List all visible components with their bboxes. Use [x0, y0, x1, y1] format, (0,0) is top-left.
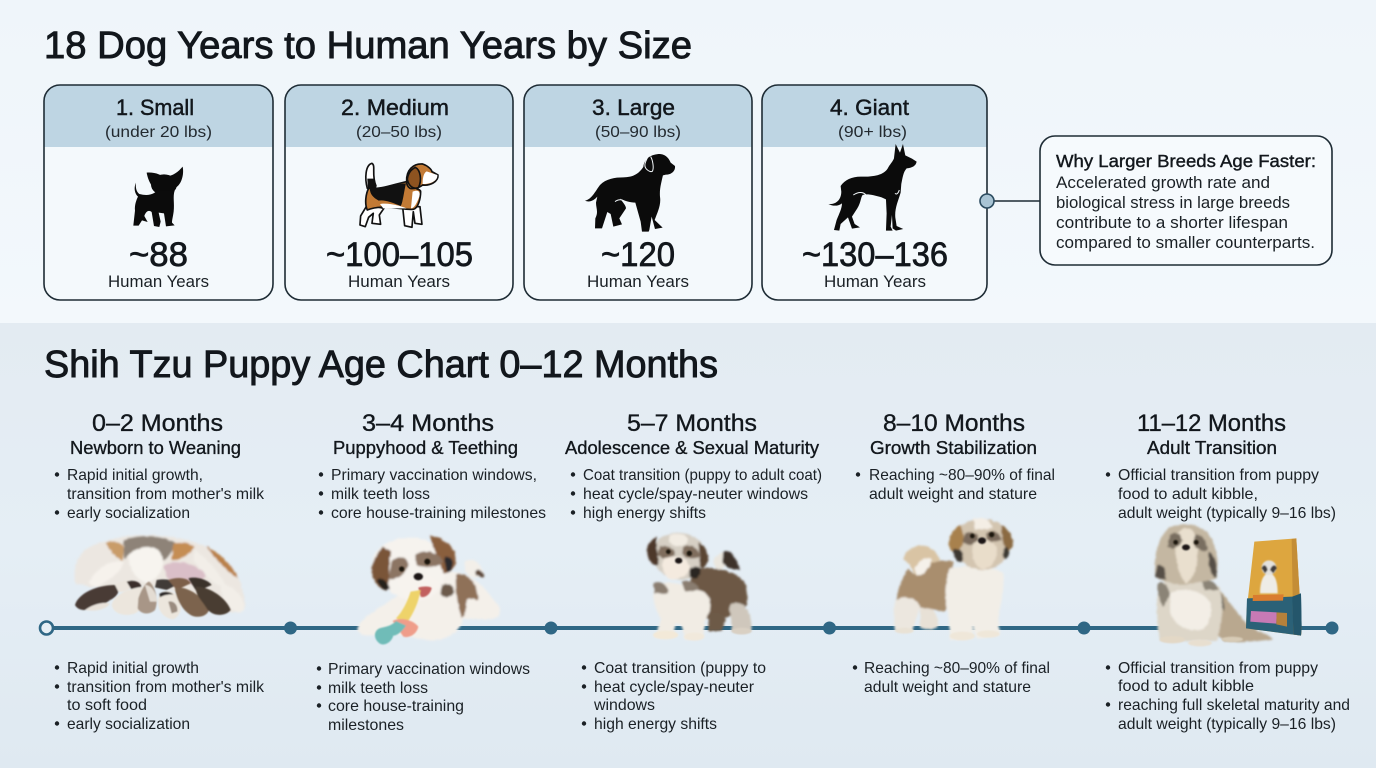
- stage 1 lower bullets: Rapid initial growth: [67, 660, 199, 677]
- callout body: contribute to a shorter lifespan: [1056, 213, 1288, 232]
- callout body: Accelerated growth rate and: [1056, 173, 1270, 192]
- stage 2 lower bullets: core house-training: [328, 698, 464, 715]
- stage 4 upper bullets: [856, 467, 1055, 503]
- stage 2 subtitle: Puppyhood & Teething: [333, 437, 518, 458]
- stage 2 upper bullets: Primary vaccination windows,: [331, 467, 537, 484]
- stage 1 lower bullets: transition from mother's milk: [67, 679, 265, 696]
- stage 4 header and notes: [856, 410, 1055, 503]
- stage 3 upper bullets: [571, 467, 822, 522]
- stage 2 lower bullets: Primary vaccination windows: [328, 661, 530, 678]
- weight range: large: (50–90 lbs): [595, 124, 681, 141]
- stage 5 upper bullets: food to adult kibble,: [1118, 486, 1258, 503]
- callout body: compared to smaller counterparts.: [1056, 233, 1315, 252]
- stage 5 lower bullets: reaching full skeletal maturity and: [1118, 697, 1350, 714]
- stage 3 lower bullets: high energy shifts: [594, 716, 717, 733]
- image: juvenile shih tzu: [894, 518, 1013, 640]
- stage 4 upper bullets: Reaching ~80–90% of final: [869, 467, 1055, 484]
- panel: medium dog card: [285, 85, 513, 300]
- stat: giant: ~130–136: [802, 236, 948, 274]
- timeline: [40, 622, 1338, 634]
- weight range: giant: (90+ lbs): [838, 124, 907, 141]
- stage 1 heading: 0–2 Months: [92, 410, 223, 437]
- stage 4 subtitle: Growth Stabilization: [870, 437, 1037, 458]
- stage 1 upper bullets: transition from mother's milk: [67, 486, 265, 503]
- stage 3 lower bullets: windows: [593, 697, 655, 714]
- stage 3 lower bullets: heat cycle/spay-neuter: [594, 679, 755, 696]
- unit: medium: Human Years: [348, 272, 450, 291]
- stage 1 upper bullets: [55, 467, 265, 522]
- stage 3 upper bullets: Coat transition (puppy to adult coat): [583, 467, 822, 484]
- image: adult shih tzu: [1155, 524, 1273, 646]
- stage 5 lower bullets: Official transition from puppy: [1118, 660, 1318, 677]
- stage 2 lower bullets: milestones: [328, 717, 404, 734]
- stage 1 lower bullets: early socialization: [67, 716, 190, 733]
- background: bottom section: [0, 323, 1376, 768]
- stage 3 lower bullets: Coat transition (puppy to: [594, 660, 766, 677]
- title: puppy age chart: Shih Tzu Puppy Age Chart 0–12 Months: [44, 344, 718, 386]
- icon: chihuahua silhouette: [133, 167, 183, 227]
- stage 4 upper bullets: adult weight and stature: [869, 486, 1037, 503]
- stat: small: ~88: [129, 236, 188, 274]
- stage 3 lower bullets: [582, 660, 766, 733]
- stage 1 upper bullets: Rapid initial growth,: [67, 467, 203, 484]
- image: mother dog nursing puppies: [75, 535, 245, 619]
- stage 3 upper bullets: heat cycle/spay-neuter windows: [583, 486, 808, 503]
- callout heading: Why Larger Breeds Age Faster:: [1056, 151, 1316, 171]
- stat: medium: ~100–105: [326, 236, 473, 274]
- icon: great dane silhouette: [828, 144, 917, 231]
- heading: large: 3. Large: [592, 95, 675, 120]
- unit: giant: Human Years: [824, 272, 926, 291]
- image: adolescent shih tzu: [647, 533, 752, 641]
- stage 2 lower bullets: [317, 661, 530, 734]
- stage 4 lower bullets: adult weight and stature: [864, 679, 1031, 696]
- image: dog food bag: [1246, 538, 1302, 636]
- stage 5 upper bullets: adult weight (typically 9–16 lbs): [1118, 505, 1336, 522]
- weight range: small: (under 20 lbs): [105, 124, 212, 141]
- stage 5 upper bullets: Official transition from puppy: [1118, 467, 1319, 484]
- connector: giant card to callout: [980, 194, 1040, 208]
- weight range: medium: (20–50 lbs): [356, 124, 442, 141]
- heading: small: 1. Small: [116, 95, 194, 120]
- stage 2 heading: 3–4 Months: [362, 410, 494, 437]
- stage 5 lower bullets: [1106, 660, 1350, 733]
- stage 4 lower bullets: [853, 660, 1050, 696]
- stage 3 header and notes: [565, 410, 822, 522]
- panel: small dog card: [44, 85, 273, 300]
- callout body: biological stress in large breeds: [1056, 193, 1290, 212]
- stage 5 upper bullets: [1106, 467, 1336, 522]
- stage 3 subtitle: Adolescence & Sexual Maturity: [565, 437, 820, 458]
- stage 4 lower bullets: Reaching ~80–90% of final: [864, 660, 1050, 677]
- icon: retriever silhouette: [585, 154, 675, 232]
- callout: why larger breeds age faster: [1040, 136, 1332, 265]
- panel: large dog card: [524, 85, 752, 300]
- heading: medium: 2. Medium: [341, 95, 449, 120]
- stage 1 upper bullets: early socialization: [67, 505, 190, 522]
- stage 3 upper bullets: high energy shifts: [583, 505, 706, 522]
- stage 1 lower bullets: to soft food: [67, 697, 147, 714]
- stage 5 heading: 11–12 Months: [1137, 410, 1286, 437]
- stage 2 header and notes: [319, 410, 546, 522]
- panel: giant dog card: [762, 85, 987, 300]
- stage 2 upper bullets: core house-training milestones: [331, 505, 546, 522]
- stage 2 upper bullets: milk teeth loss: [331, 486, 430, 503]
- stage 3 heading: 5–7 Months: [627, 410, 757, 437]
- heading: giant: 4. Giant: [830, 95, 909, 120]
- stage 2 lower bullets: milk teeth loss: [328, 680, 428, 697]
- background: top section: [0, 0, 1376, 323]
- stat: large: ~120: [601, 236, 675, 274]
- stage 1 lower bullets: [55, 660, 265, 733]
- stage 1 header and notes: [55, 410, 265, 522]
- stage 5 subtitle: Adult Transition: [1147, 437, 1277, 458]
- stage 5 lower bullets: adult weight (typically 9–16 lbs): [1118, 716, 1336, 733]
- stage 5 lower bullets: food to adult kibble: [1118, 678, 1254, 695]
- title: dog years: 18 Dog Years to Human Years by Size: [44, 25, 692, 67]
- unit: small: Human Years: [108, 272, 209, 291]
- image: puppy chewing toy: [357, 536, 500, 644]
- stage 5 header and notes: [1106, 410, 1336, 522]
- stage 2 upper bullets: [319, 467, 546, 522]
- stage 4 heading: 8–10 Months: [883, 410, 1025, 437]
- stage 1 subtitle: Newborn to Weaning: [70, 437, 241, 458]
- icon: beagle: [360, 163, 438, 227]
- callout body: [1056, 173, 1315, 252]
- unit: large: Human Years: [587, 272, 689, 291]
